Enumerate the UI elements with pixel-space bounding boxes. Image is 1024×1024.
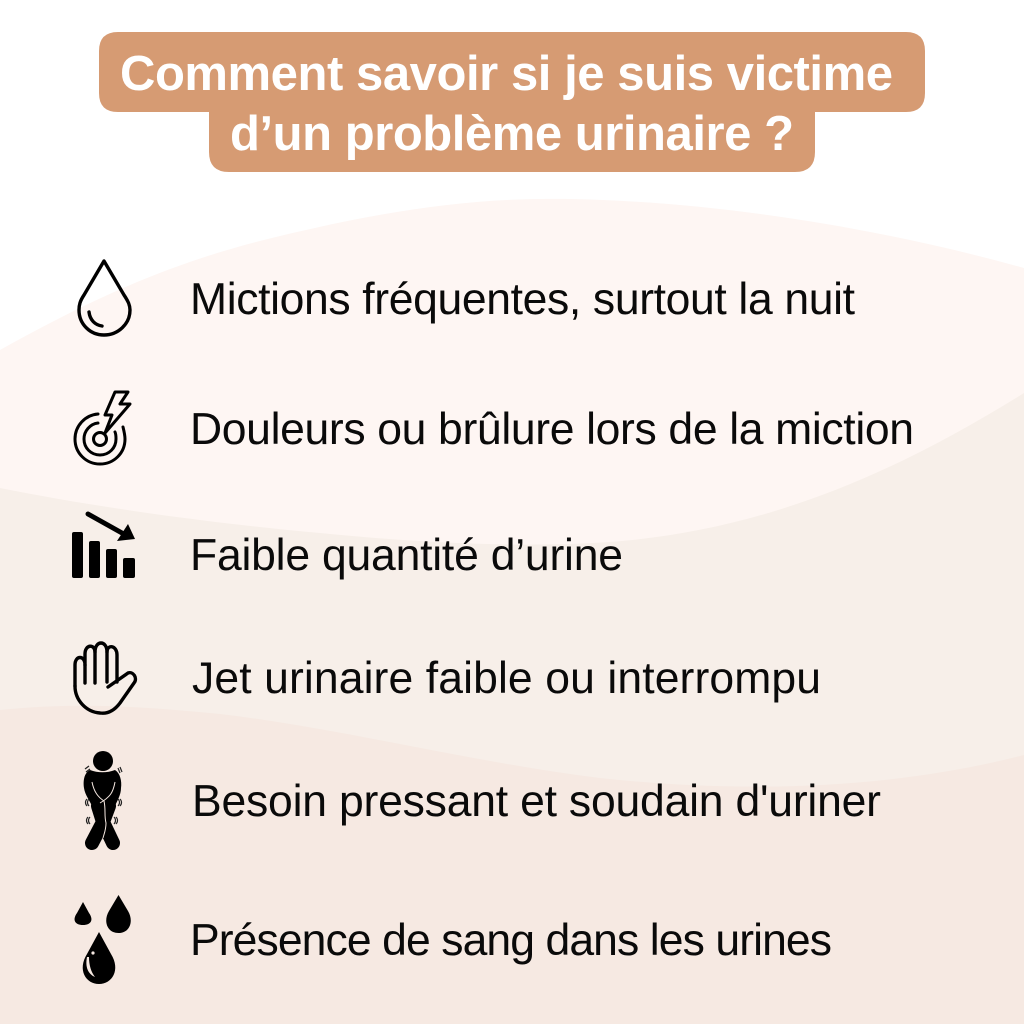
symptom 3	[72, 514, 623, 580]
icon: raised hand	[75, 643, 135, 713]
label: Faible quantité d’urine	[190, 531, 623, 580]
icon: target with lightning bolt	[75, 392, 130, 464]
icon: water drop	[79, 261, 130, 335]
label: Mictions fréquentes, surtout la nuit	[190, 275, 856, 324]
label: Jet urinaire faible ou interrompu	[192, 654, 821, 703]
label: Besoin pressant et soudain d'uriner	[192, 777, 881, 826]
symptom 5	[84, 751, 881, 843]
title text: d’un problème urinaire ?	[230, 107, 794, 161]
label: Douleurs ou brûlure lors de la miction	[190, 405, 914, 454]
symptom 6	[75, 895, 832, 984]
icon: blood drops	[75, 895, 131, 984]
symptom 4	[75, 643, 821, 713]
title	[99, 32, 925, 172]
icon: descending bar chart with arrow	[72, 514, 135, 578]
label: Présence de sang dans les urines	[190, 916, 832, 965]
title banner	[99, 32, 925, 172]
title text: Comment savoir si je suis victime	[120, 47, 893, 101]
title text	[120, 47, 893, 161]
symptom 1	[79, 261, 856, 335]
icon: person holding urge	[84, 751, 122, 843]
symptom 2	[75, 392, 914, 464]
